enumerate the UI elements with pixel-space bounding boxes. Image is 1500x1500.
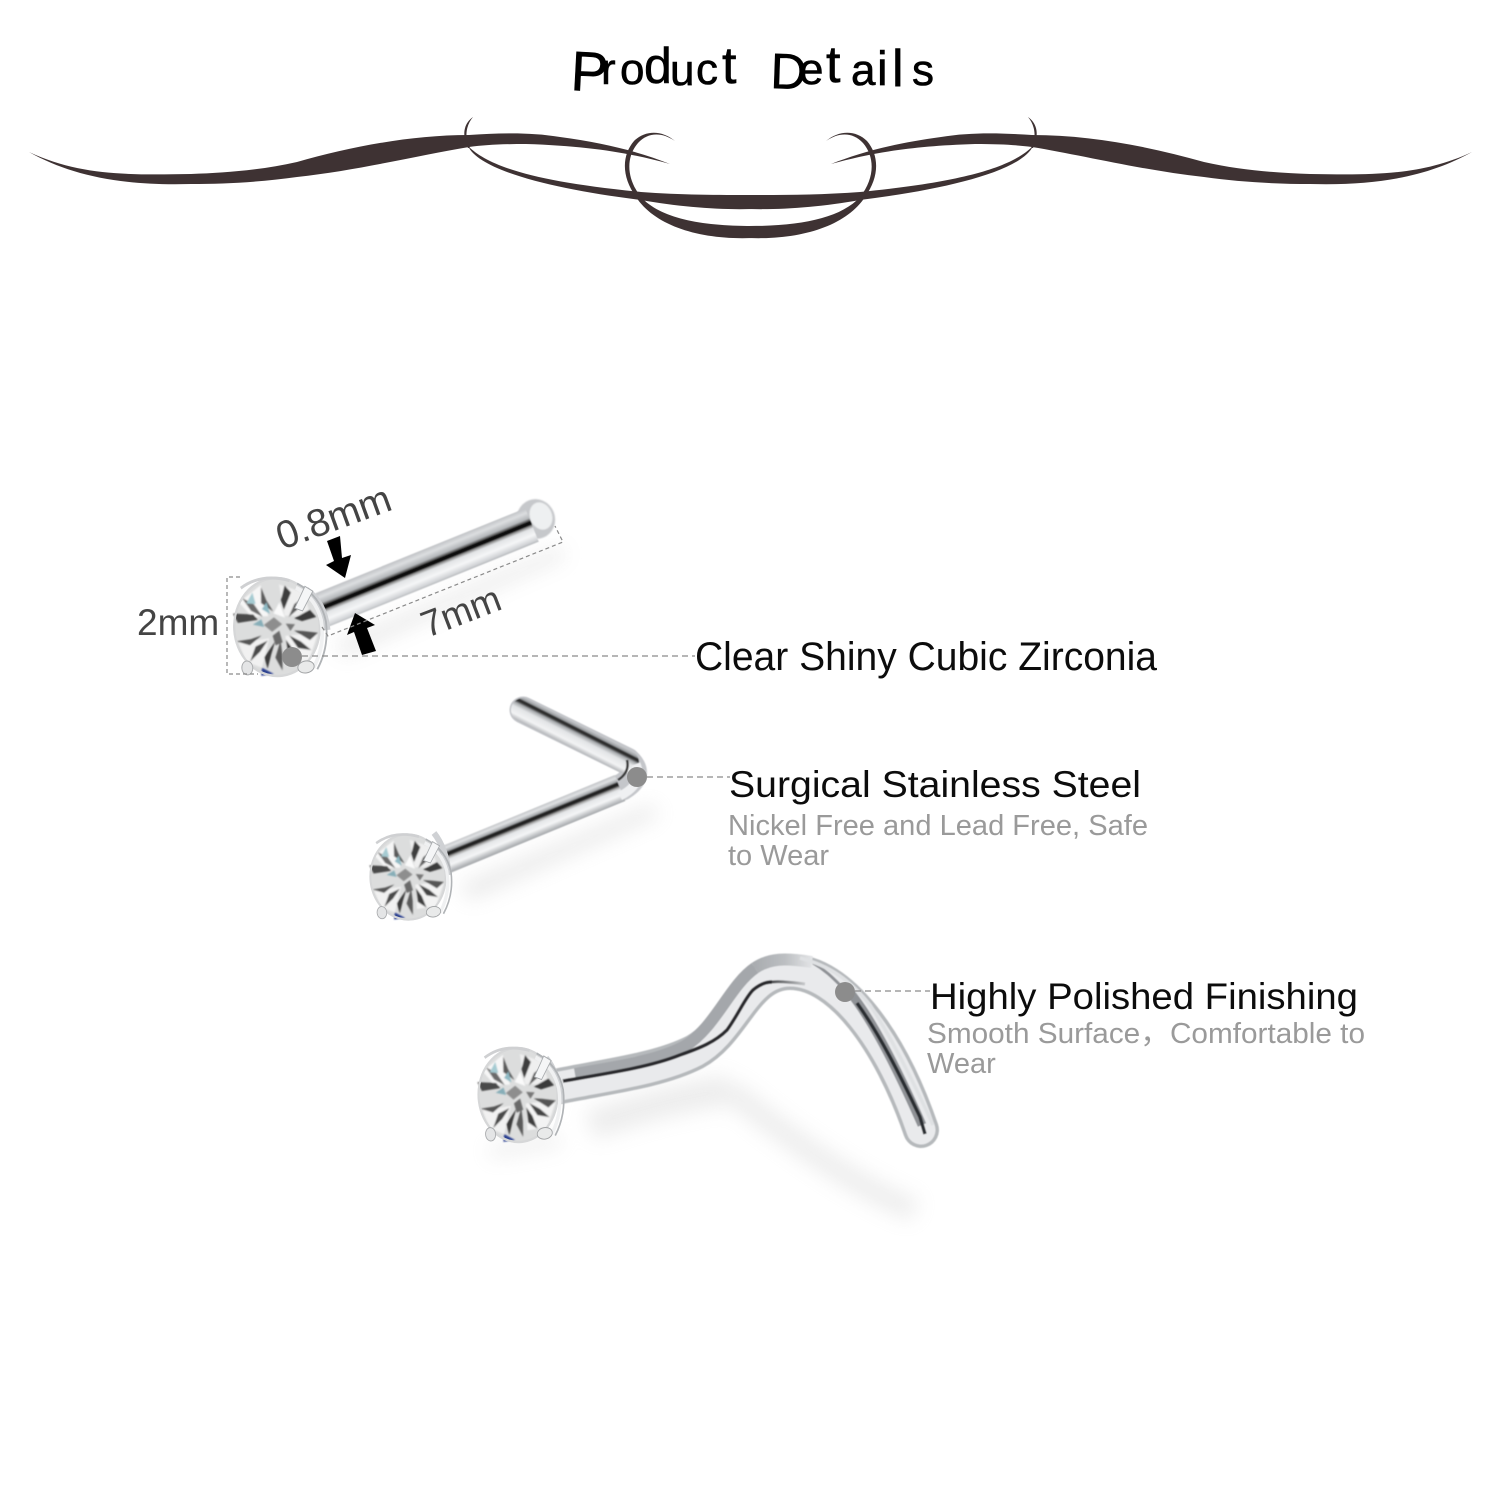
callout: 2mm dimension [137,577,258,674]
callout: 0.8mm dimension [270,477,397,655]
description: Nickel Free and Lead Free, Safe [728,810,1148,842]
title: t [722,37,737,95]
7mm bracket [322,526,563,636]
decorative flourish divider [29,117,1472,238]
leader line [292,655,695,657]
callout: 7mm dimension [322,526,563,645]
title: a [851,46,876,95]
screw crystal [472,1040,569,1149]
flourish: left half [29,117,752,238]
stud seat [306,590,327,630]
screw seat [546,1058,561,1103]
stud shaft [322,525,532,610]
title: D [770,43,808,100]
product: screw nose stud [472,958,933,1210]
title: P [569,39,610,104]
L pin crystal [364,827,456,926]
title: l [892,40,904,98]
L pin seat [434,833,449,875]
title: s [912,46,934,95]
label: Clear Shiny Cubic Zirconia [695,635,1158,679]
2mm bracket [227,577,258,674]
description [927,1018,1365,1080]
callout: Surgical Stainless Steel [627,764,1148,872]
title: i [877,43,888,96]
product: L-shaped nose pin [364,710,660,926]
screw shaft [560,958,933,1134]
leader line [845,990,930,992]
leader line [637,776,730,778]
leader dot [282,647,302,667]
7mm label: 7mm [415,578,507,645]
title: u [670,46,694,95]
title: r [601,45,616,94]
arrow: pointing to bottom of shaft [347,613,376,655]
heading: Surgical Stainless Steel [729,764,1141,805]
title: d [644,38,672,94]
title: t [826,36,841,94]
0.8mm label: 0.8mm [270,477,397,558]
2mm label: 2mm [137,602,219,643]
stud crystal [227,570,332,683]
description: Smooth Surface，Comfortable to [927,1018,1365,1050]
description: to Wear [728,840,829,872]
description: Wear [927,1048,996,1080]
description [728,810,1148,872]
title: c [696,45,718,94]
L pin shaft [445,710,638,860]
stud end cap [511,493,561,545]
screw shadow [490,1090,915,1210]
leader dot [627,767,647,787]
title: o [620,45,644,94]
flourish: right half [749,117,1472,238]
heading: Highly Polished Finishing [930,976,1358,1017]
title: e [799,45,823,94]
stud shadow [335,548,566,655]
callout: Clear Shiny Cubic Zirconia [282,635,1158,679]
leader dot [835,982,855,1002]
arrow: pointing to top of shaft [326,536,351,578]
callout: Highly Polished Finishing [835,976,1365,1080]
L pin shadow [460,805,660,900]
product: straight nose stud [227,493,566,683]
